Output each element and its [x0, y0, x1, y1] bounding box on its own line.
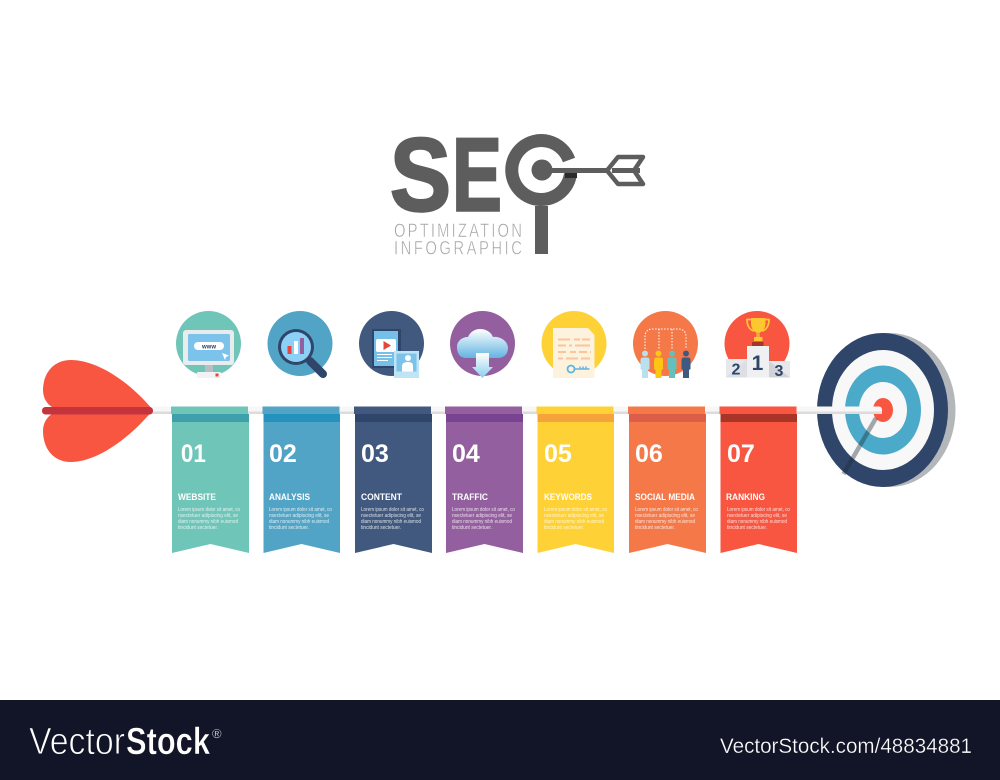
panel: 07 ranking	[720, 311, 797, 553]
body text: tincidunt sectetuer.	[452, 525, 492, 531]
subtitle: OPTIMIZATION	[394, 220, 522, 241]
number: 03	[361, 440, 389, 468]
heading letters S and E: S	[390, 116, 451, 233]
arrow shaft	[150, 406, 882, 414]
icon: website monitor: www	[201, 344, 216, 350]
panel: 03 content	[354, 311, 432, 553]
body text: diam nonummy nibh euismod	[544, 519, 604, 525]
body text: nsectetuer adipiscing elit, se	[727, 513, 787, 519]
label: CONTENT	[361, 492, 402, 503]
icon: magnifier chart	[268, 311, 332, 376]
heading letters S and E: E	[452, 118, 502, 233]
icon: trophy podium: 2	[732, 362, 741, 378]
icon: keyword document and key	[542, 311, 606, 378]
body text	[178, 507, 240, 531]
ribbon	[536, 406, 614, 553]
body text	[544, 507, 607, 531]
body text: Lorem ipsum dolor sit amet, co	[178, 507, 240, 513]
logo wordmark: Vector	[29, 721, 125, 763]
icon: arrow fletching	[42, 360, 153, 462]
body text: diam nonummy nibh euismod	[727, 519, 787, 525]
icon: content document	[359, 311, 424, 378]
number: 07	[727, 440, 755, 468]
number: 06	[635, 440, 663, 468]
body text: tincidunt sectetuer.	[635, 525, 675, 531]
icon: trophy podium: 1	[752, 352, 764, 375]
body text: nsectetuer adipiscing elit, se	[544, 513, 604, 519]
body text: diam nonummy nibh euismod	[269, 519, 329, 525]
icon: trophy podium	[724, 311, 790, 380]
body text: tincidunt sectetuer.	[269, 525, 309, 531]
label: ANALYSIS	[269, 492, 310, 503]
ribbon	[445, 406, 523, 553]
body text	[727, 507, 790, 531]
panel: 01 website	[171, 311, 249, 553]
body text: nsectetuer adipiscing elit, se	[635, 513, 695, 519]
heading letters S and E	[390, 116, 502, 233]
image id: VectorStock.com/48834881	[720, 735, 972, 758]
body text: diam nonummy nibh euismod	[635, 519, 695, 525]
label: RANKING	[726, 492, 765, 503]
body text: diam nonummy nibh euismod	[361, 519, 421, 525]
icon: trophy podium: 3	[775, 363, 784, 380]
body text: Lorem ipsum dolor sit amet, co	[269, 507, 332, 513]
body text: tincidunt sectetuer.	[361, 525, 401, 531]
number: 05	[544, 440, 572, 468]
panel: 05 keywords	[536, 311, 614, 553]
subtitle: INFOGRAPHIC	[394, 238, 522, 259]
body text: Lorem ipsum dolor sit amet, co	[544, 507, 607, 513]
number: 01	[181, 440, 206, 468]
ribbon	[354, 406, 432, 553]
panel: 04 traffic	[445, 311, 523, 553]
body text: nsectetuer adipiscing elit, se	[178, 513, 238, 519]
panel: 06 social media	[628, 311, 706, 553]
body text: Lorem ipsum dolor sit amet, co	[635, 507, 698, 513]
body text	[635, 507, 698, 531]
label: TRAFFIC	[452, 492, 488, 503]
icon: social network people	[633, 311, 698, 378]
logo wordmark: ®	[212, 726, 222, 741]
body text: Lorem ipsum dolor sit amet, co	[452, 507, 515, 513]
number: 02	[269, 440, 297, 468]
icon: target board	[797, 333, 956, 487]
title: SEO logo	[390, 116, 643, 259]
body text: Lorem ipsum dolor sit amet, co	[361, 507, 424, 513]
ribbon	[171, 406, 249, 553]
panel: 02 analysis	[262, 311, 340, 553]
footer bar	[0, 700, 1000, 780]
label: KEYWORDS	[544, 492, 592, 503]
number: 04	[452, 440, 480, 468]
body text: Lorem ipsum dolor sit amet, co	[727, 507, 790, 513]
ribbon	[720, 406, 797, 553]
logo wordmark: Stock	[126, 721, 211, 763]
icon: website monitor	[176, 311, 241, 378]
logo wordmark	[29, 721, 222, 763]
body text: nsectetuer adipiscing elit, se	[452, 513, 512, 519]
body text	[452, 507, 515, 531]
body text: diam nonummy nibh euismod	[178, 519, 238, 525]
ribbon	[628, 406, 706, 553]
body text	[361, 507, 424, 531]
label: WEBSITE	[178, 492, 216, 503]
body text: tincidunt sectetuer.	[544, 525, 584, 531]
ribbon	[262, 406, 340, 553]
icon: cloud download	[450, 311, 515, 378]
icon: magnifier with target	[512, 141, 643, 254]
label: SOCIAL MEDIA	[635, 492, 695, 503]
body text: tincidunt sectetuer.	[178, 525, 218, 531]
body text: nsectetuer adipiscing elit, se	[361, 513, 421, 519]
body text: nsectetuer adipiscing elit, se	[269, 513, 329, 519]
body text: diam nonummy nibh euismod	[452, 519, 512, 525]
body text	[269, 507, 332, 531]
subtitle	[394, 220, 522, 259]
body text: tincidunt sectetuer.	[727, 525, 767, 531]
